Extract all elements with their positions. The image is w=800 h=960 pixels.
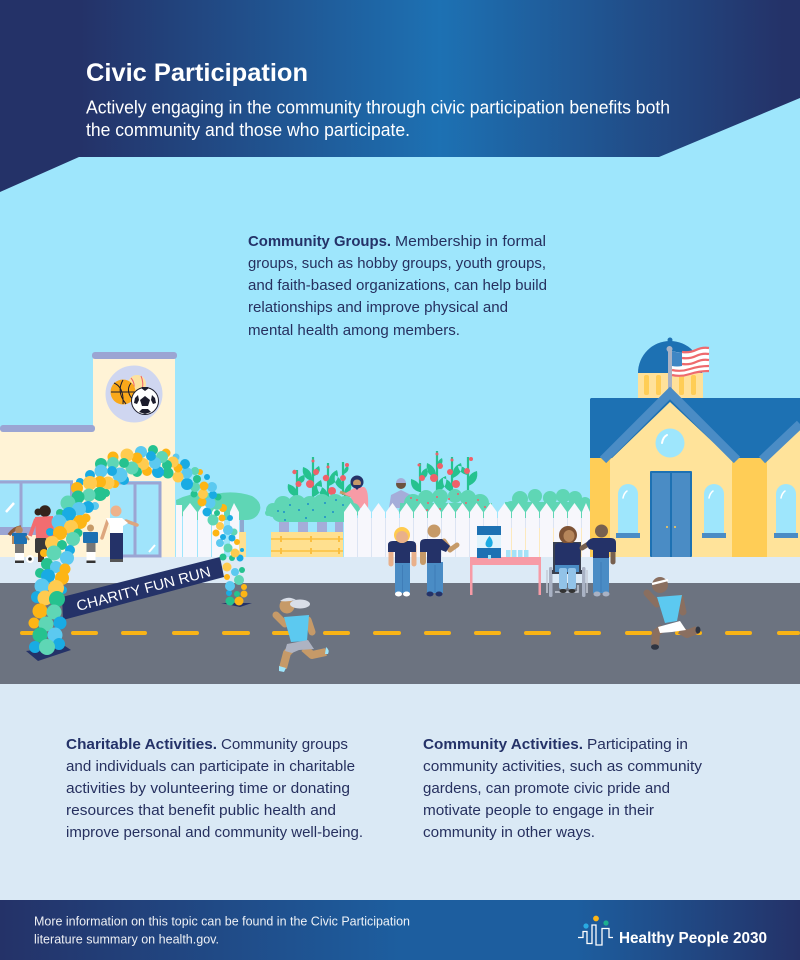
text block: charitable activities: Charitable Activities.	[66, 736, 217, 753]
door	[110, 481, 161, 557]
text block: community groups: Membership in formal	[395, 233, 546, 250]
government building	[590, 338, 800, 557]
left tree	[176, 492, 271, 557]
text block: community activities: gardens, can promote civic pride and	[423, 780, 670, 797]
text block: charitable activities: and individuals can participate in charitable	[66, 758, 355, 775]
text block: community groups: groups, such as hobby groups, youth groups,	[248, 255, 546, 272]
text block: community activities: Participating in	[587, 736, 688, 753]
gardener with beard	[340, 476, 368, 508]
text block: community activities: community in other ways.	[423, 824, 595, 841]
white picket fence	[344, 503, 590, 557]
person in wheelchair	[547, 526, 587, 597]
icon: soccer ball	[26, 555, 34, 563]
logo: Healthy People 2030: Healthy People 2030	[619, 930, 767, 947]
text block: community activities: motivate people to engage in their	[423, 802, 654, 819]
text block: community groups: relationships and improve physical and	[248, 299, 508, 316]
woman in red	[30, 505, 54, 562]
walls	[590, 420, 800, 557]
text block: community activities: Community Activities.	[423, 736, 583, 753]
planter box with bush	[266, 494, 360, 557]
icon: water cooler	[477, 526, 501, 559]
runner right	[647, 577, 700, 650]
text block: community groups	[248, 233, 547, 339]
round window	[656, 428, 684, 458]
people at community center	[9, 505, 137, 563]
text block: community activities: community activities, such as community	[423, 758, 703, 775]
logo: Healthy People 2030	[578, 916, 767, 947]
volunteer man	[420, 524, 457, 596]
dome	[638, 338, 703, 400]
text block: charitable activities: resources that benefit public health and	[66, 802, 336, 819]
gardener in lilac	[389, 478, 414, 508]
gable left	[610, 402, 732, 557]
runner left	[276, 598, 329, 672]
text block: charitable activities	[66, 736, 363, 841]
text block: community groups: Community Groups.	[248, 233, 391, 250]
sky background	[0, 0, 800, 600]
banner: charity fun run: CHARITY FUN RUN	[75, 564, 212, 615]
green bush	[505, 489, 591, 518]
gable right	[767, 430, 800, 557]
arch bases	[26, 603, 252, 661]
icon: sports balls sign	[106, 366, 162, 422]
text block: community activities	[423, 736, 703, 841]
man beside wheelchair	[582, 524, 616, 596]
banner: charity fun run	[62, 557, 224, 620]
road dashes	[20, 631, 800, 635]
text block: charitable activities: improve personal and community well-being.	[66, 824, 363, 841]
balloon arch	[28, 445, 248, 655]
community center building	[0, 352, 177, 557]
child in blue	[83, 524, 98, 563]
tomato plants left	[288, 457, 351, 498]
footer bar	[0, 900, 800, 960]
subtitle	[86, 98, 670, 140]
footer note: More information on this topic can be found in the Civic Participation	[34, 914, 410, 928]
windows	[0, 480, 73, 535]
volunteer woman blonde	[388, 527, 416, 596]
text block: community groups: and faith-based organizations, can help build	[248, 277, 547, 294]
double door	[650, 471, 692, 557]
footer note	[34, 914, 410, 946]
water table	[470, 526, 541, 595]
cups	[506, 550, 528, 557]
text block: charitable activities: Community groups	[221, 736, 348, 753]
road	[0, 583, 800, 684]
roof trim	[603, 393, 800, 460]
left fence	[176, 503, 239, 557]
arched windows	[616, 484, 798, 538]
text block: community groups: mental health among members.	[248, 322, 460, 339]
roof	[590, 398, 800, 458]
flowering bush	[399, 489, 494, 519]
child with ponytail	[9, 526, 29, 563]
sidewalk	[0, 557, 800, 584]
icon: American flag	[666, 346, 709, 395]
lower panel	[0, 684, 800, 900]
subtitle: Actively engaging in the community through civic participation benefits both	[86, 98, 670, 118]
title: Civic Participation	[86, 59, 308, 87]
text block: charitable activities: activities by volunteering time or donating	[66, 780, 350, 797]
man in white	[102, 506, 137, 562]
tomato plants right	[411, 451, 477, 492]
footer note: literature summary on health.gov.	[34, 932, 219, 946]
subtitle: the community and those who participate.	[86, 120, 410, 140]
header banner	[0, 0, 800, 192]
